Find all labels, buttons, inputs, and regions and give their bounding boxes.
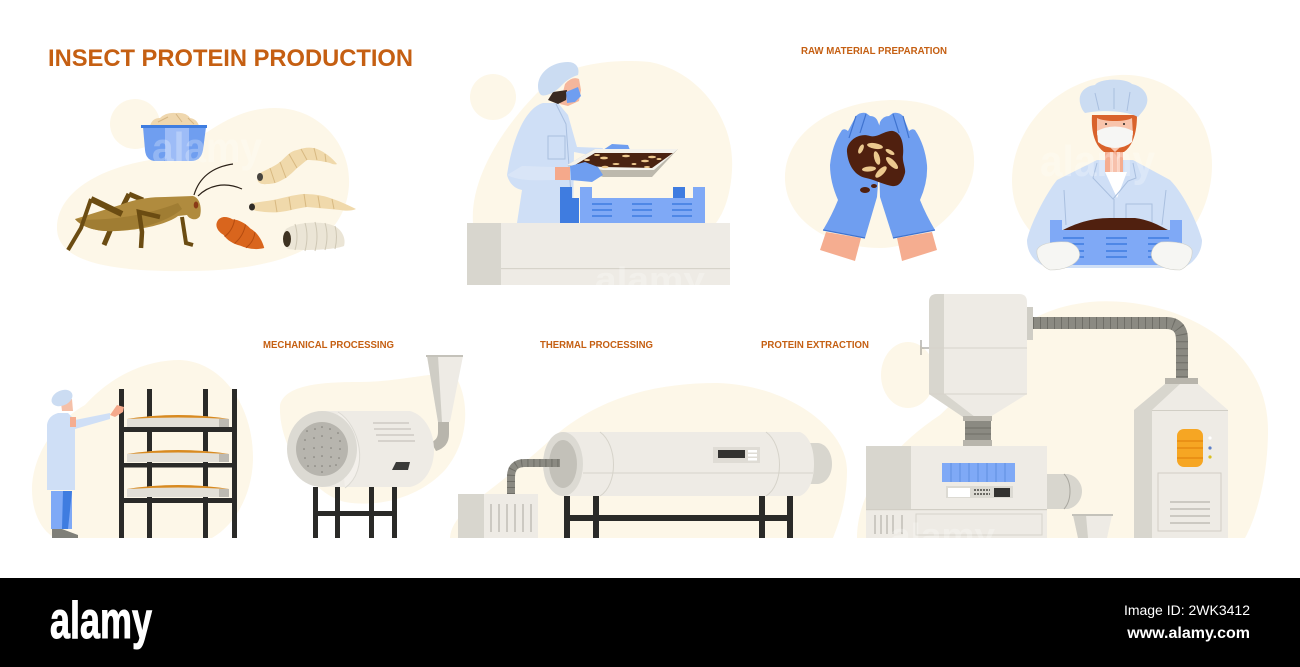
watermarks: alamy: [152, 124, 263, 171]
heading: mechanical processing: MECHANICAL PROCESSING: [263, 339, 394, 351]
background blob: [450, 383, 847, 538]
icon: white pupa: [283, 222, 345, 251]
heading: raw material preparation: RAW MATERIAL PREPARATION: [801, 45, 947, 57]
background blob: [32, 360, 253, 538]
background blob: [1012, 75, 1212, 250]
icon: grasshopper: [68, 164, 242, 250]
background blob: [280, 374, 465, 504]
heading: protein extraction: PROTEIN EXTRACTION: [761, 339, 869, 351]
icon: arms: [820, 232, 937, 261]
panel: insects: [57, 99, 356, 271]
duct: [1033, 323, 1182, 379]
icon: near arm and glove: [555, 162, 603, 182]
funnel: [426, 355, 463, 451]
panel: worker holding crate: [1012, 75, 1212, 270]
seam: [338, 412, 360, 488]
panel: worker with tray at table: [467, 61, 732, 285]
side outlet: [1047, 474, 1082, 509]
base machine: [866, 446, 1047, 538]
legs: [564, 496, 793, 538]
icon: worker coat: [1027, 160, 1202, 268]
icon: larva middle: [249, 194, 356, 212]
watermarks: alamy: [595, 261, 705, 297]
tray: bottom: [127, 485, 229, 497]
seams: [583, 432, 813, 496]
lapels: [1064, 163, 1166, 225]
watermarks: alamy: [890, 517, 995, 553]
logo: alamy: [50, 592, 152, 650]
website: www.alamy.com: [1126, 625, 1250, 642]
title: INSECT PROTEIN PRODUCTION: [48, 45, 413, 72]
cylinder body: [322, 411, 434, 487]
vents and control: [373, 423, 415, 470]
control panel: [713, 447, 760, 463]
hopper: [921, 294, 1033, 447]
heading: thermal processing: THERMAL PROCESSING: [540, 339, 653, 351]
image id: Image ID: 2WK3412: [1124, 602, 1250, 618]
icon: orange pupa: [212, 211, 270, 258]
crate: [560, 187, 705, 223]
icon: chef cap: [1080, 80, 1147, 117]
end cap: [808, 443, 832, 484]
icon: worker: [47, 387, 124, 538]
watermarks: alamy: [1040, 137, 1155, 186]
duct: [511, 463, 560, 494]
cuffs: [823, 114, 935, 238]
icon: larva upper: [257, 148, 337, 184]
icon: neck and face: [1092, 115, 1137, 172]
cabinet: [1134, 378, 1228, 538]
icon: soil on crate: [1063, 218, 1168, 230]
icon: bowl of larvae: [141, 113, 207, 161]
panel: thermal oven: [450, 383, 847, 538]
tray: [567, 149, 678, 177]
panel: grinder: [280, 355, 465, 538]
tray: top: [127, 415, 229, 427]
legs: [313, 487, 397, 538]
panel: protein extraction machines: [857, 294, 1268, 538]
front grate: [287, 411, 357, 487]
rack posts and shelves: [119, 389, 237, 538]
duct ribs: [1033, 323, 1182, 379]
oven front: [543, 432, 583, 496]
crate: [1050, 220, 1182, 265]
collection cup: [1072, 514, 1113, 538]
panel: drying racks: [32, 360, 253, 538]
background blob: [785, 100, 974, 248]
background blob: [470, 61, 732, 223]
table: [467, 223, 730, 285]
tray: middle: [127, 450, 229, 462]
icon: left glove: [823, 113, 882, 238]
gloves: [1037, 242, 1192, 270]
panel: gloved hands: [785, 100, 974, 261]
watermarks: [152, 124, 1155, 553]
icon: right glove: [878, 113, 935, 238]
background blob: [857, 301, 1268, 538]
icon: soil with larvae: [847, 131, 905, 193]
blower box: [458, 494, 538, 538]
footer bar: [0, 578, 1300, 667]
oven cylinder: [563, 432, 814, 496]
background blob: [57, 99, 349, 271]
icon: worker: [507, 62, 630, 223]
